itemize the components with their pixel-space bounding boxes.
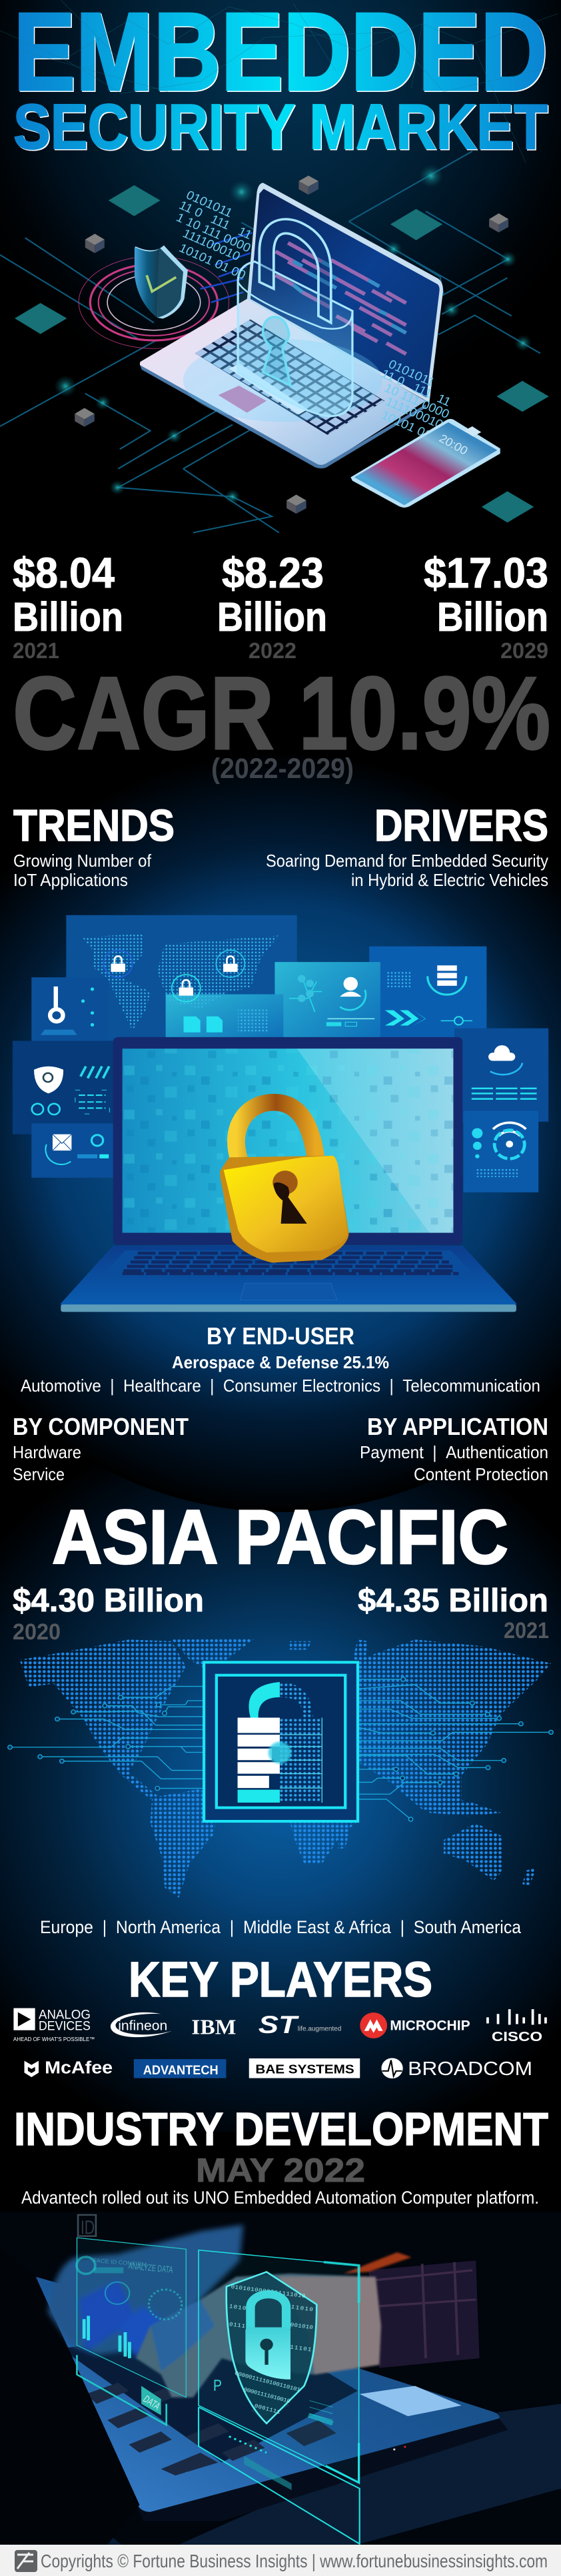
region stat: 2021: $4.35 Billion xyxy=(358,1583,548,1619)
segment: by application: BY APPLICATION xyxy=(367,1413,548,1440)
logo: IBM: IBM xyxy=(191,2016,236,2039)
circuit lock frame xyxy=(204,1662,358,1821)
grey cubes xyxy=(75,176,508,514)
binary code floating text: 10101 01 00 xyxy=(379,408,450,449)
logo: Microchip xyxy=(360,2012,470,2038)
trends block: IoT Applications xyxy=(13,870,128,890)
code lines on screen xyxy=(275,243,406,354)
teal diamonds xyxy=(15,185,549,522)
drivers block: in Hybrid & Electric Vehicles xyxy=(351,870,548,890)
logo: Broadcom: BROADCOM xyxy=(408,2058,532,2080)
binary code floating text: 111100010 xyxy=(384,394,445,432)
binary code floating text: 111100010 xyxy=(181,226,243,263)
logo: Cisco xyxy=(488,2009,546,2044)
stat: 2021 xyxy=(13,549,123,663)
circuit traces xyxy=(10,1679,551,1819)
company logos xyxy=(13,2008,546,2080)
binary inside shield: 10101 xyxy=(229,2304,251,2312)
logo: Analog Devices: AHEAD OF WHAT'S POSSIBLE™ xyxy=(13,2036,95,2042)
logo: Analog Devices: ANALOG xyxy=(39,2008,91,2022)
dotted map panel xyxy=(83,934,279,1031)
trends block: Growing Number of xyxy=(13,851,152,871)
binary inside shield: 11101 xyxy=(290,2344,312,2353)
binary inside shield: 0101010000011111010 xyxy=(231,2284,306,2300)
stat: 2022: $8.23 xyxy=(222,549,324,597)
security shield xyxy=(135,245,188,318)
smartphone xyxy=(350,419,500,508)
binary code floating text: 0101011 xyxy=(386,357,437,389)
segment: by end-user: BY END-USER xyxy=(207,1322,354,1350)
pink rings xyxy=(79,256,229,348)
logo: BAE Systems xyxy=(249,2058,360,2078)
key players heading: KEY PLAYERS xyxy=(129,1952,432,2007)
logo: BAE Systems: BAE SYSTEMS xyxy=(255,2062,354,2076)
segment: by component xyxy=(13,1413,189,1484)
lock: white half xyxy=(238,1682,280,1803)
logo: Cisco: CISCO xyxy=(492,2029,542,2044)
segment: by end-user: Aerospace & Defense 25.1% xyxy=(172,1352,389,1372)
hero illustration: secure laptop xyxy=(0,0,558,533)
hexagon and user icon xyxy=(289,975,374,1027)
segment: by component: Service xyxy=(13,1464,65,1484)
desk and background xyxy=(0,2212,561,2545)
logo: Microchip: MICROCHIP xyxy=(390,2017,470,2034)
server icon xyxy=(385,965,472,1026)
segment: by component: BY COMPONENT xyxy=(13,1413,189,1440)
binary inside shield: 00001111010010 xyxy=(243,2387,291,2405)
golden padlock xyxy=(220,1102,349,1262)
binary inside shield: 111010 xyxy=(286,2304,314,2313)
stat: 2022 xyxy=(217,549,327,663)
segment: by application: Content Protection xyxy=(414,1464,548,1484)
region stat: 2021 xyxy=(358,1583,549,1643)
laptop screen xyxy=(247,183,443,402)
photo: hands typing on a secured laptop xyxy=(0,2212,561,2545)
logo: Infineon xyxy=(111,2012,172,2037)
stat: 2029: $17.03 xyxy=(424,549,548,597)
dashboard and laptop illustration xyxy=(13,915,548,1312)
binary inside shield: 1001010 xyxy=(286,2322,314,2331)
binary inside shield: 0111 xyxy=(229,2322,246,2330)
keyboard keys xyxy=(86,2381,336,2475)
title block xyxy=(13,0,549,164)
logo: Advantech: ADVANTECH xyxy=(143,2063,219,2078)
region stat: 2020 xyxy=(13,1583,204,1645)
left hologram panel xyxy=(77,2215,186,2425)
stat: 2022: Billion xyxy=(217,594,327,640)
development date: MAY 2022 xyxy=(196,2152,365,2189)
region stat: 2020: $4.30 Billion xyxy=(13,1583,204,1619)
laptop body xyxy=(36,2277,508,2521)
left hologram labels: ID xyxy=(81,2218,95,2238)
segment: by component: Hardware xyxy=(13,1442,81,1462)
dotted world map xyxy=(20,1639,551,1898)
document and dots icons xyxy=(183,1009,269,1033)
logo: Infineon: infineon xyxy=(118,2018,167,2034)
circuit nodes xyxy=(8,1677,553,1821)
stat: 2029: Billion xyxy=(437,594,548,640)
touchpad xyxy=(219,386,267,413)
drivers block xyxy=(266,801,548,890)
laptop screen with tiles xyxy=(113,1037,462,1245)
binary code floating text: 10101 01 00 xyxy=(177,240,248,282)
left typing hand xyxy=(48,2225,243,2358)
region stat: 2021: 2021 xyxy=(504,1618,549,1643)
right hologram panel xyxy=(199,2250,360,2544)
binary inside shield xyxy=(229,2284,314,2415)
left hologram labels: DATA xyxy=(141,2394,163,2412)
footer bar xyxy=(0,2545,561,2576)
blue data streams xyxy=(201,232,253,302)
stat: 2022: 2022 xyxy=(249,638,296,663)
segment: by application: Payment | Authentication xyxy=(360,1442,548,1462)
segment: by end-user xyxy=(21,1322,540,1396)
laptop base and keyboard xyxy=(61,1246,516,1312)
floating dashboard panels xyxy=(13,915,548,1192)
left panel icons xyxy=(32,1067,109,1164)
right typing hand xyxy=(136,2274,381,2397)
CAGR period: (2022-2029) xyxy=(211,753,354,785)
binary code floating text: 1 10 111 0000 xyxy=(174,210,253,254)
logo: ST life.augmented xyxy=(259,2011,341,2038)
trends block xyxy=(13,801,175,890)
small lock badges xyxy=(104,950,245,1002)
stat: 2029: 2029 xyxy=(500,638,548,663)
binary code floating text: 10 111 0000 xyxy=(382,380,452,421)
laptop screen edge xyxy=(0,2248,139,2545)
holographic shield with lock xyxy=(227,2272,316,2423)
network lines behind title xyxy=(0,0,558,163)
left hologram labels: ANALYZE DATA xyxy=(128,2261,174,2276)
stat: 2021: $8.04 xyxy=(13,549,115,597)
world map with circuit lock xyxy=(8,1639,553,1898)
region heading: ASIA PACIFIC xyxy=(52,1495,508,1580)
stat: 2021: Billion xyxy=(13,594,123,640)
hologram padlock xyxy=(238,219,352,416)
footer logo mark xyxy=(15,2550,37,2572)
stat: 2029 xyxy=(424,549,548,663)
left hologram labels xyxy=(81,2218,174,2415)
other regions list: Europe | North America | Middle East & Africa | South America xyxy=(40,1917,522,1937)
laptop base xyxy=(140,299,426,468)
hologram P label: P xyxy=(213,2377,222,2395)
right panel icons xyxy=(472,1045,537,1177)
smartphone: 20:00 xyxy=(437,432,470,458)
binary code floating text xyxy=(174,188,453,449)
logo: ST life.augmented: ST xyxy=(259,2011,299,2038)
segment: by application xyxy=(360,1413,548,1484)
glow nodes xyxy=(54,165,532,504)
market size stats xyxy=(13,549,548,663)
keyboard xyxy=(195,319,384,435)
binary inside shield: 0000011110100110101 xyxy=(234,2370,301,2393)
hologram ellipse xyxy=(183,339,382,422)
lock: digital half xyxy=(269,1682,322,1803)
circuit lines xyxy=(0,151,540,533)
binary code floating text: 11 0 111 11 xyxy=(177,198,255,242)
trends block: TRENDS xyxy=(13,801,175,851)
binary inside shield: 0001111 xyxy=(253,2403,281,2415)
key icon xyxy=(41,987,94,1035)
binary code floating text: 11 0 111 11 xyxy=(379,366,453,409)
region stat: 2020: 2020 xyxy=(13,1619,61,1645)
logo: Analog Devices xyxy=(13,2008,95,2042)
lock inside shield xyxy=(245,2294,290,2379)
logo: Advantech xyxy=(134,2059,226,2078)
binary code floating text: 0101011 xyxy=(184,188,235,220)
logo: Analog Devices: DEVICES xyxy=(39,2019,91,2034)
logo: ST life.augmented: life.augmented xyxy=(298,2026,341,2033)
stat: 2021: 2021 xyxy=(13,638,59,663)
logo: McAfee: McAfee xyxy=(45,2058,113,2077)
left hologram labels: FACE ID CONFIRM xyxy=(93,2257,147,2268)
